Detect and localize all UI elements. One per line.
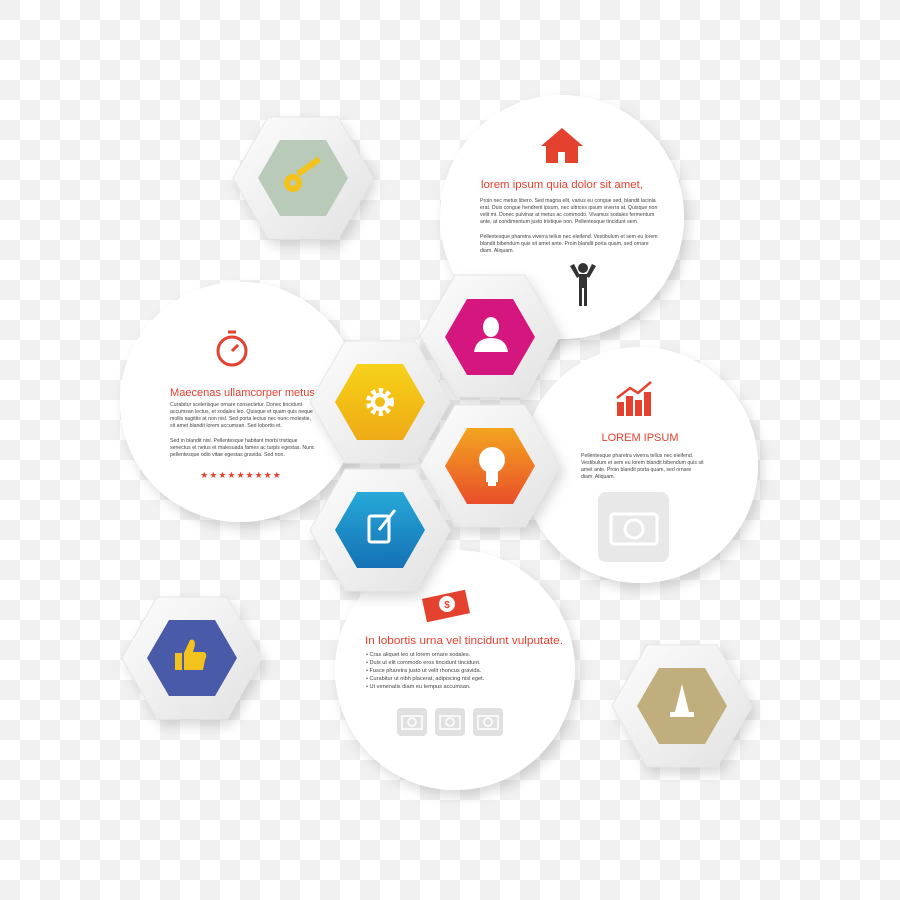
- icon: bulb: [479, 447, 505, 486]
- text block: left: Curabitur scelerisque ornare consectetur. Donec tincidunt: [170, 402, 303, 408]
- text block: right: [581, 453, 704, 480]
- text block: left: [170, 402, 315, 458]
- icons: cameras row: [397, 708, 503, 736]
- icon: person: [474, 317, 508, 352]
- heading: bottom: In lobortis urna vel tincidunt vulputate.: [365, 635, 563, 647]
- text block: top right: Proin nec metus libero. Sed magna elit, varius eu congue sed, blandit lacinia: [480, 198, 656, 204]
- icon: traffic cone: [670, 684, 694, 717]
- hexagon: pencil (blue): [310, 469, 450, 591]
- bullet list: bottom: [366, 652, 485, 690]
- icon: bar chart: [617, 382, 651, 416]
- text block: top right: diam. Aliquam.: [480, 248, 514, 254]
- circle panel: top right: [440, 95, 684, 339]
- text block: top right: Pellentesque pharetra viverra tellus nec eleifend. Vestibulum et sem eu lorem: [480, 234, 658, 240]
- icon: house: [541, 128, 583, 163]
- heading: top right: lorem ipsum quia dolor sit amet,: [481, 179, 643, 191]
- text block: right: Vestibulum et sem eu lorem blandit bibendum quis sit: [581, 460, 704, 466]
- text block: left: senectus et netus et malesuada fames ac turpis egestas. Nunc: [170, 445, 315, 451]
- bullet list: bottom: • Cras aliquet leo ut lorem ornare sodales.: [366, 652, 471, 658]
- hexagon: gear (yellow): [310, 341, 450, 463]
- heading: left: Maecenas ullamcorper metus.: [170, 387, 318, 399]
- heading: right: LOREM IPSUM: [601, 432, 679, 444]
- bullet list: bottom: • Fusce pharetra justo ut velit rhoncus gravida.: [366, 668, 482, 674]
- text block: top right: [480, 198, 658, 254]
- circle panel: left: [120, 282, 360, 522]
- text block: left: accumsan lectus, et sodales leo. Quisque et quam quis neque: [170, 409, 313, 415]
- text block: top right: ante, at condimentum justo tristique non. Pellentesque tincidunt sem.: [480, 219, 638, 225]
- icon: money: [422, 590, 470, 622]
- text block: right: amet ante. Proin blandit porta quam, sed ornare: [581, 467, 691, 473]
- text block: right: diam. Aliquam.: [581, 474, 615, 480]
- hexagon: thumbs up: [122, 597, 262, 719]
- icon: stopwatch: [218, 332, 246, 365]
- text block: left: Sed in blandit nisi. Pellentesque habitant morbi tristique: [170, 438, 298, 444]
- text block: left: pellentesque odio vitae egestas gravida. Sed non.: [170, 452, 285, 458]
- hexagon: key: [233, 117, 373, 239]
- text block: left: mollis sagittis at non nisl. Sed porta lectus nec nunc molestie,: [170, 416, 311, 422]
- hexagon: person (magenta): [420, 275, 560, 397]
- text block: top right: blandit bibendum quis sit amet ante. Proin blandit porta quam, sed ornare: [480, 241, 649, 247]
- text block: left: sit amet blandit lorem accumsan. Sed lobortis et.: [170, 423, 282, 429]
- icon: key: [284, 157, 321, 192]
- icon: thumb: [175, 640, 206, 670]
- hexagon: bulb (orange): [420, 405, 560, 527]
- icon: camera: [598, 492, 669, 562]
- text block: top right: velit mi. Donec pulvinar at metus ac commodo. Vivamus sodales fermentum: [480, 212, 654, 218]
- circle panel: bottom: [335, 550, 575, 790]
- icon: edit: [369, 510, 395, 542]
- bullet list: bottom: • Curabitur ut nibh placerat, adipiscing nisl eget.: [366, 676, 485, 682]
- circle panel: right: [522, 347, 758, 583]
- text block: right: Pellentesque pharetra viverra tellus nec eleifend.: [581, 453, 693, 459]
- text block: top right: erat. Duis congue hendrerit ipsum, nec ultrices ipsum viverra at. Quisque non: [480, 205, 657, 211]
- rating stars: ★★★★★★★★★: [200, 470, 282, 480]
- icon: person cheering: [570, 263, 596, 306]
- icon: money: $: [444, 600, 450, 611]
- icon: gear: [369, 391, 391, 413]
- hexagon: cone: [612, 645, 752, 767]
- bullet list: bottom: • Duis ut elit commodo eros tincidunt tincidunt.: [366, 660, 481, 666]
- bullet list: bottom: • Ut venenatis diam eu tempus accumsan.: [366, 684, 471, 690]
